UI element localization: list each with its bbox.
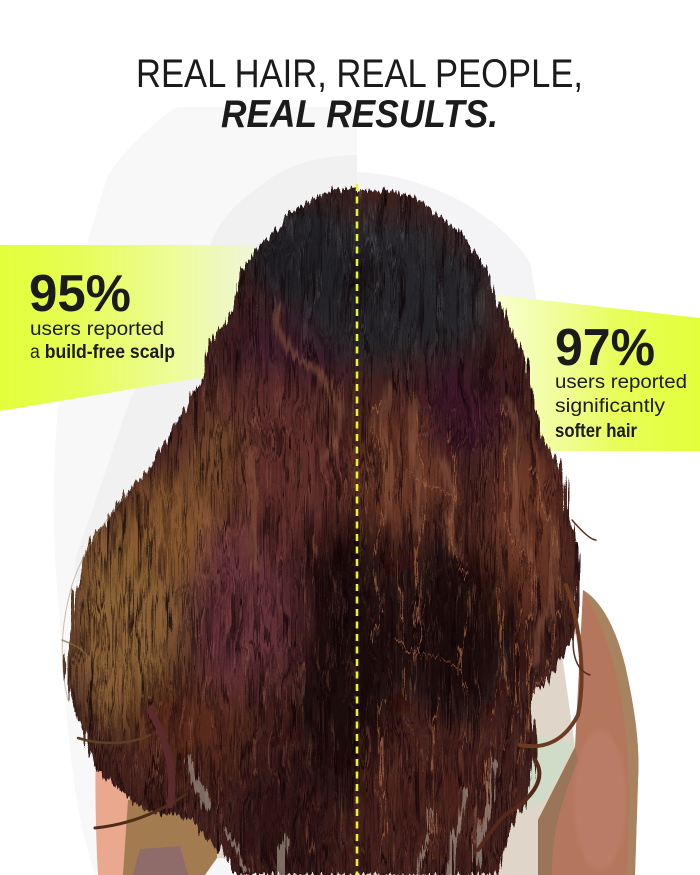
stat: 95 percent: a build-free scalp	[30, 341, 175, 363]
dark strands	[240, 380, 520, 820]
title	[136, 52, 583, 136]
stat: 97 percent: softer hair	[555, 420, 637, 442]
loose locks and flyaways	[62, 490, 596, 850]
person: arms and top	[95, 590, 638, 875]
callout band: left	[0, 245, 255, 411]
copper strands	[375, 390, 561, 860]
hair	[50, 180, 610, 875]
stat: 95 percent: 95%	[29, 265, 131, 323]
copper hair texture	[64, 330, 579, 875]
title: REAL RESULTS.	[221, 93, 498, 136]
hair base colour	[50, 180, 610, 875]
stat: 97 percent: users reported	[555, 371, 687, 393]
stat: 97 percent	[555, 319, 687, 442]
stat: 95 percent: users reported	[30, 318, 164, 340]
hair colour zones	[70, 200, 563, 870]
title: REAL HAIR, REAL PEOPLE,	[136, 52, 583, 96]
callout band: right	[497, 295, 700, 451]
grey scalp texture	[208, 186, 524, 374]
dark hair texture	[50, 180, 610, 875]
soft copper locks	[250, 310, 555, 660]
shirt gaps between locks	[188, 758, 495, 875]
stat: 97 percent: significantly	[555, 395, 665, 417]
stat: 95 percent	[29, 265, 175, 363]
centre dashed divider	[356, 184, 358, 875]
stat: 97 percent: 97%	[555, 319, 655, 377]
